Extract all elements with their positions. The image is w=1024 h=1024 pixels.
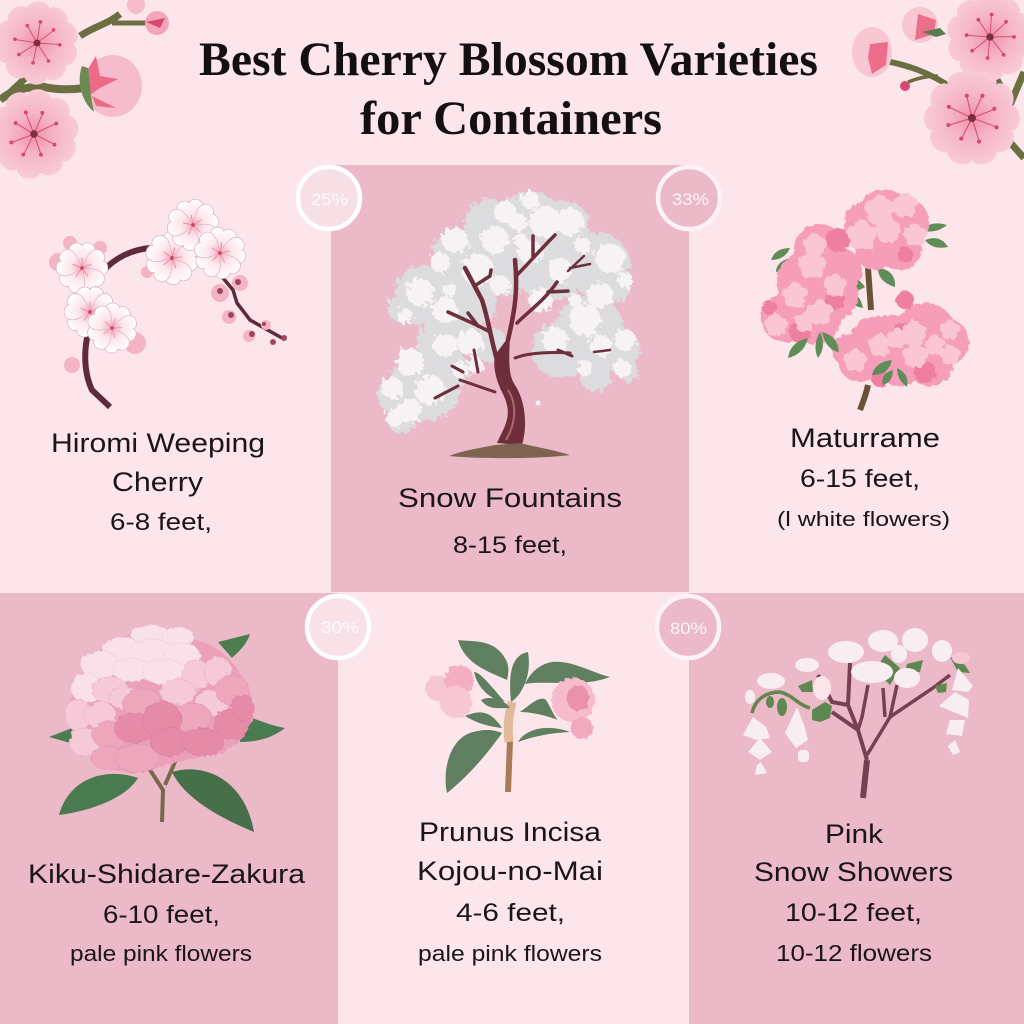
panel: Snow Fountains — [377, 191, 640, 559]
panel: Kiku-Shidare-Zakura — [28, 625, 306, 966]
badge: 80%: 80% — [670, 619, 707, 638]
panel: Hiromi Weeping Cherry — [49, 195, 287, 536]
decoration: top left blossoms — [0, 0, 169, 191]
badge: 80% — [657, 596, 719, 658]
badge: 30%: 30% — [321, 618, 359, 637]
heading: Hiromi Weeping Cherry: Cherry — [112, 467, 204, 497]
text: Hiromi Weeping height: 6-8 feet, — [110, 509, 212, 536]
badge: 25% — [298, 167, 360, 229]
heading: Pink Snow Showers: Pink — [825, 819, 884, 849]
icon: branching tree with hanging white flowers — [743, 628, 973, 798]
heading: Hiromi Weeping Cherry — [51, 428, 265, 497]
heading: Kiku-Shidare-Zakura: Kiku-Shidare-Zakura — [28, 859, 306, 889]
text: Kiku flowers: pale pink flowers — [70, 941, 252, 966]
text: Prunus flowers: pale pink flowers — [418, 941, 602, 966]
text: Maturrame height: 6-15 feet, — [800, 465, 920, 493]
panel: Pink Snow Showers — [743, 628, 973, 966]
heading: Prunus Incisa Kojou-no-Mai: Prunus Incisa — [419, 817, 602, 847]
heading: Prunus Incisa Kojou-no-Mai — [417, 817, 603, 886]
panel: Kiku-Shidare-Zakura background — [0, 593, 338, 1024]
panel: Prunus Incisa Kojou-no-Mai — [417, 640, 610, 966]
badge: 30% — [307, 596, 369, 658]
text: Pink Snow Showers flowers: 10-12 flowers — [776, 940, 932, 966]
heading: Snow Fountains: Snow Fountains — [398, 483, 622, 513]
icon: white cherry branch — [49, 195, 287, 407]
icon: pink peony-like blossom — [49, 625, 285, 832]
text: Pink Snow Showers height: 10-12 feet, — [785, 899, 922, 927]
panel: Pink Snow Showers background — [689, 593, 1024, 1024]
text: Snow Fountains height: 8-15 feet, — [453, 532, 567, 559]
icon: pink double blossom clusters — [761, 190, 969, 410]
heading: Maturrame: Maturrame — [790, 423, 940, 453]
title: Best Cherry Blossom Varieties — [199, 33, 818, 86]
decoration: top right blossoms — [852, 0, 1024, 191]
text: Maturrame flowers: (l white flowers) — [777, 509, 950, 531]
title — [199, 33, 818, 145]
badge: 25%: 25% — [311, 190, 348, 209]
heading: Prunus Incisa Kojou-no-Mai: Kojou-no-Mai — [417, 856, 603, 886]
heading: Hiromi Weeping Cherry: Hiromi Weeping — [51, 428, 265, 458]
badge: 33% — [658, 167, 720, 229]
icon: white flowering tree — [377, 191, 640, 458]
heading: Pink Snow Showers: Snow Showers — [754, 857, 953, 887]
badge: 33%: 33% — [672, 190, 709, 209]
panel: Snow Fountains background — [331, 165, 689, 592]
panel: Maturrame — [761, 190, 969, 531]
heading: Pink Snow Showers — [754, 819, 953, 887]
icon: leafy stem with pink flowers — [425, 640, 610, 793]
text: Kiku height: 6-10 feet, — [103, 901, 220, 929]
title: for Containers — [360, 92, 662, 145]
text: Prunus height: 4-6 feet, — [456, 899, 565, 927]
